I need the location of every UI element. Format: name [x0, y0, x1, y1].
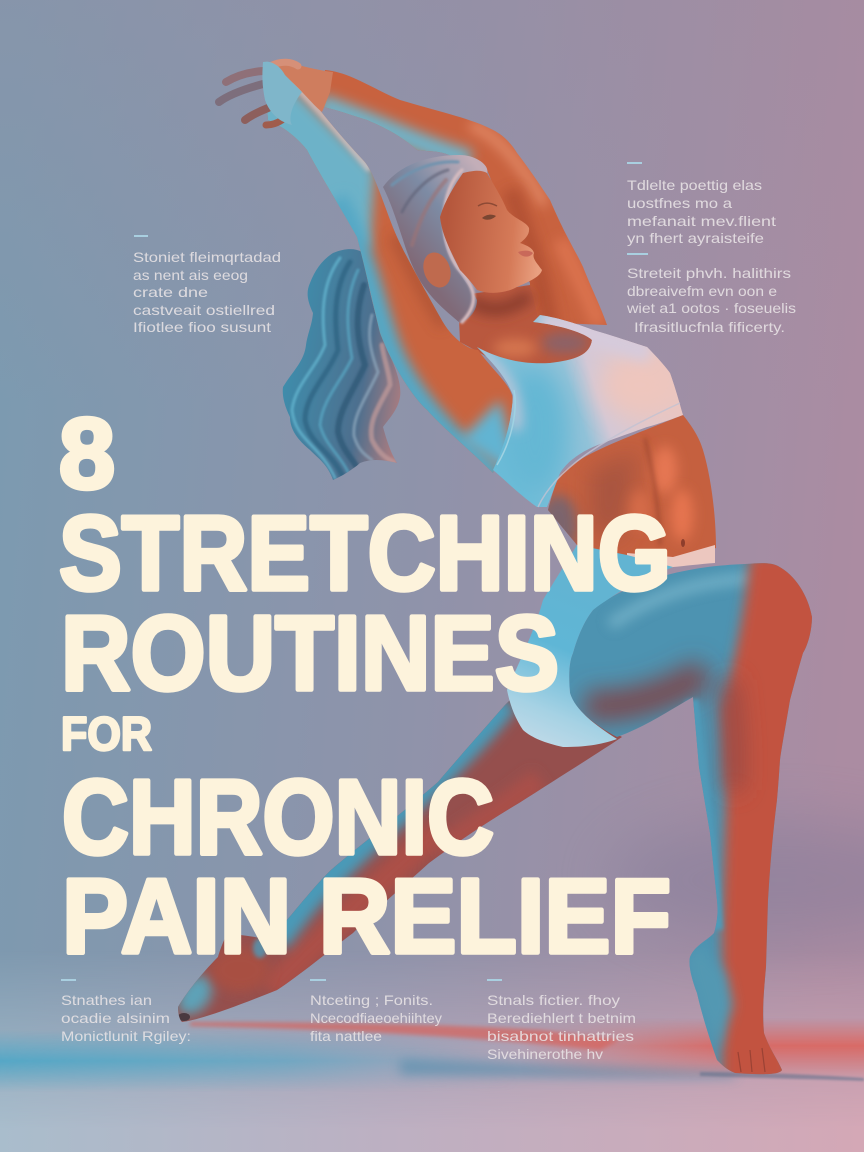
text block: bottom middle: Ntceting ; Fonits.: [310, 992, 433, 1008]
title: pain relief: PAIN RELIEF: [62, 858, 671, 976]
text block: upper right: yn fhert ayraisteife: [627, 230, 764, 246]
text block: bottom right: [487, 979, 636, 1062]
title: number: 8: [59, 398, 115, 510]
text block: upper right: mefanait mev.flient: [627, 213, 776, 229]
front leg: [569, 563, 812, 1074]
text block: upper left: castveait ostiellred: [133, 302, 275, 318]
figure: stretching woman: [170, 50, 830, 1085]
floor shadows: [0, 1018, 864, 1092]
text block: upper left: [133, 235, 281, 335]
back arm: [324, 70, 607, 325]
title: routines: ROUTINES: [61, 594, 559, 712]
text block: bottom middle: Ncecodfiaeoehiihtey: [310, 1010, 442, 1026]
text block: upper left: as nent ais eeog: [133, 267, 248, 283]
text block: bottom left: Monictlunit Rgiley:: [61, 1028, 191, 1044]
text block: upper left: Stoniet fleimqrtadad: [133, 249, 281, 265]
face: [440, 171, 542, 293]
title: for: FOR: [61, 707, 152, 760]
waist band: [627, 545, 715, 575]
text block: upper right: dbreaivefm evn oon e: [627, 283, 777, 299]
text block: bottom right: Stnals fictier. fhoy: [487, 992, 620, 1008]
ponytail: [282, 249, 400, 480]
neck and upper chest: [458, 285, 600, 368]
front arm: [264, 62, 513, 473]
title: [59, 398, 671, 976]
text block: upper right: wiet a1 ootos · foseuelis: [626, 300, 796, 316]
torso: [548, 415, 716, 557]
title: stretching: STRETCHING: [59, 494, 671, 612]
text block: bottom right: Berediehlert t betnim: [487, 1010, 636, 1026]
text block: bottom middle: [310, 979, 442, 1044]
text block: bottom right: Sivehinerothe hv: [487, 1046, 603, 1062]
text block: upper left: crate dne: [133, 284, 208, 300]
text block: upper right: Ifrasitlucfnla fificerty.: [634, 319, 785, 335]
hair crown: [383, 155, 487, 323]
title: chronic: CHRONIC: [62, 758, 494, 876]
ear: [419, 249, 455, 291]
text block: bottom left: ocadie alsinim: [61, 1010, 170, 1026]
text block: upper right: uostfnes mo a: [627, 195, 732, 211]
text block: bottom right: bisabnot tinhattries: [487, 1028, 634, 1044]
text block: bottom middle: fita nattlee: [310, 1028, 382, 1044]
hands: [219, 61, 333, 125]
text block: bottom left: Stnathes ian: [61, 992, 152, 1008]
text block: upper right: Tdlelte poettig elas: [627, 177, 762, 193]
back leg: [170, 690, 630, 1030]
text block: upper right: [626, 162, 796, 335]
sports bra: [477, 315, 683, 508]
text block: bottom left: [61, 979, 191, 1044]
text block: upper right: Streteit phvh. halithirs: [627, 265, 791, 281]
text block: upper left: Ifiotlee fioo susunt: [133, 319, 271, 335]
shorts: [507, 545, 673, 747]
